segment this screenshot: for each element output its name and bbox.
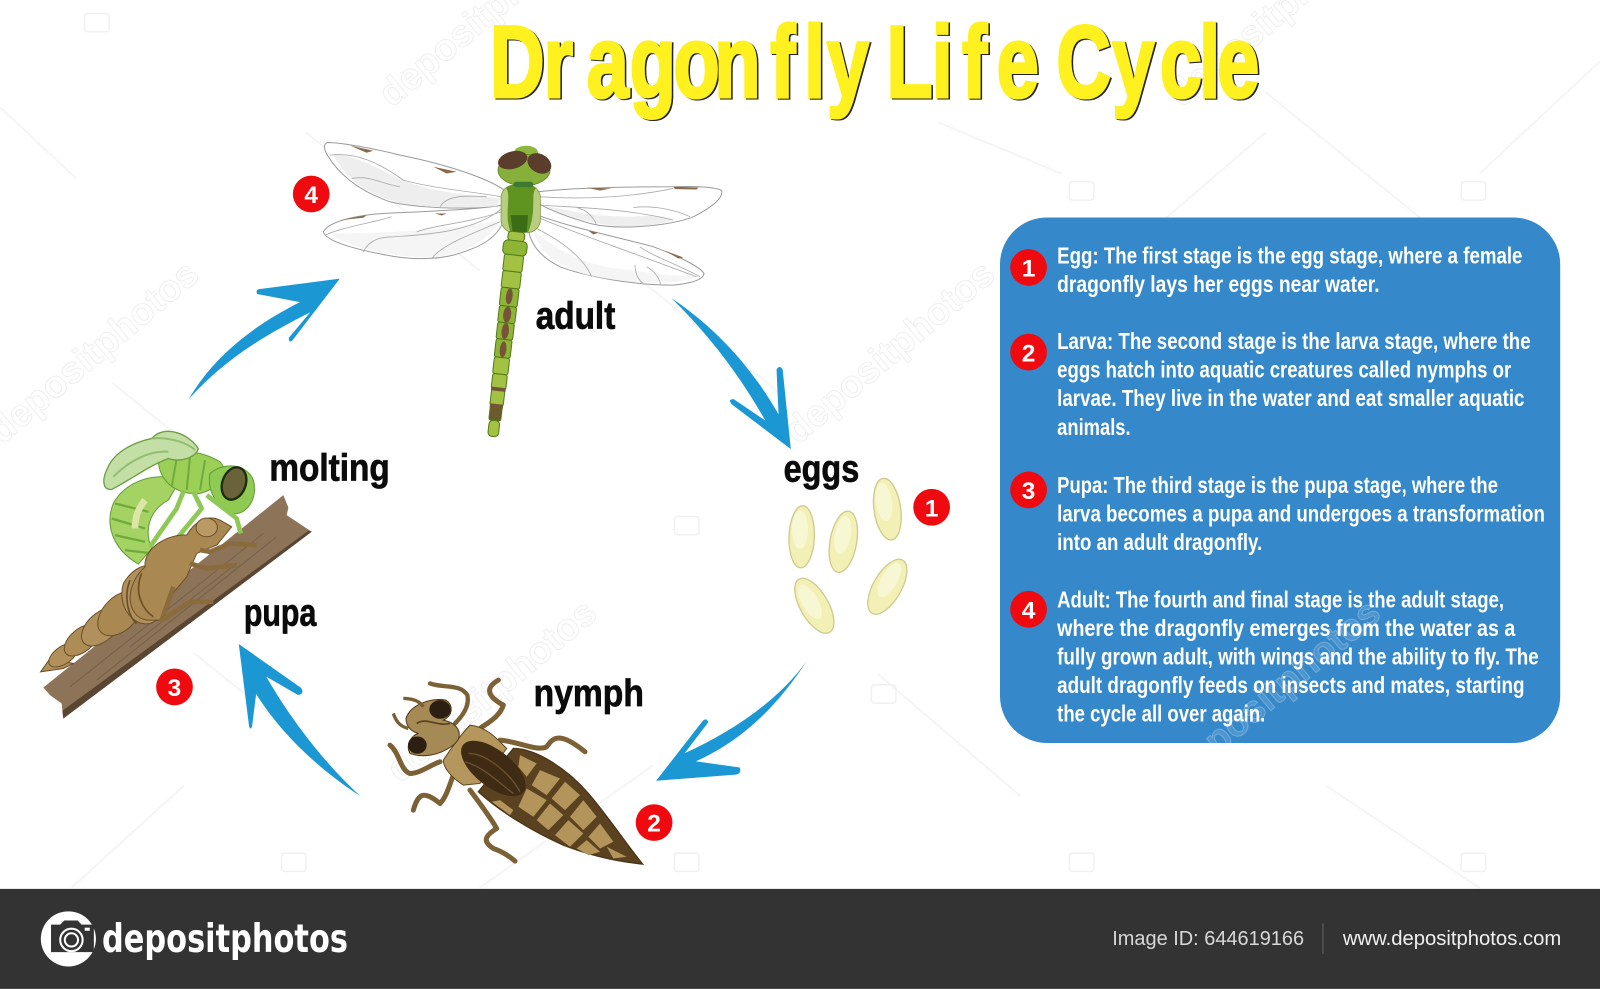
icon: adult dragonfly [323, 142, 722, 438]
panel: stage descriptions: depositphotos [1162, 591, 1388, 790]
brown exuvia [41, 518, 257, 672]
label: nymph: nymph [534, 672, 644, 714]
stage 3 pupa: 3 [1022, 478, 1035, 505]
nymph abdomen [478, 748, 643, 864]
stage 4 adult: the cycle all over again. [1057, 701, 1265, 727]
label: eggs: eggs [784, 448, 859, 490]
icon: nymph [390, 680, 643, 864]
stage 1 egg: dragonfly lays her eggs near water. [1057, 271, 1380, 297]
nymph head [393, 698, 459, 756]
arrow: nymph to pupa [239, 644, 360, 796]
badge: 4 on diagram [293, 176, 330, 212]
head [496, 146, 555, 187]
badge: 1 on diagram: 1 [925, 495, 938, 522]
website: www.depositphotos.com [1342, 928, 1561, 950]
badge: 4 on diagram: 4 [304, 182, 318, 209]
image id: Image ID: 644619166 [1112, 928, 1304, 950]
stage 4 adult: where the dragonfly emerges from the water as a [1056, 615, 1516, 641]
infographic canvas: depositphotos [776, 252, 1002, 451]
stage 4 adult: 4 [1022, 597, 1036, 624]
panel: stage descriptions [1000, 217, 1560, 790]
green adult emerging [104, 431, 255, 564]
nymph thorax and wings [443, 725, 535, 807]
badge: 2 on diagram [636, 804, 672, 841]
icon: eggs [787, 477, 915, 639]
stage 4 adult [1010, 586, 1539, 727]
badge: 1 on diagram [913, 489, 950, 526]
title: Dragonfly Life Cycle [490, 6, 1259, 120]
badge: 3 on diagram [156, 668, 193, 705]
stage 2 larva: 2 [1022, 340, 1035, 367]
abdomen [481, 230, 529, 438]
stage 1 egg [1010, 242, 1522, 297]
stage 2 larva: animals. [1057, 414, 1131, 440]
logo icon [41, 911, 96, 966]
arrow: pupa to adult [189, 279, 340, 399]
label: adult: adult [536, 295, 616, 337]
icon: molting dragonfly on branch [41, 431, 312, 718]
arrow: adult to eggs [671, 298, 791, 449]
arrow: eggs to nymph [656, 660, 807, 781]
logo wordmark: depositphotos [102, 917, 348, 962]
stage 2 larva [1010, 328, 1531, 440]
infographic canvas: depositphotos [378, 591, 604, 790]
label: pupa: pupa [244, 592, 317, 634]
badge: 3 on diagram: 3 [168, 675, 181, 702]
nymph legs and antennae [390, 680, 585, 861]
label: molting: molting [269, 447, 390, 489]
branch [43, 495, 312, 718]
badge: 2 on diagram: 2 [647, 811, 661, 838]
stage 3 pupa: into an adult dragonfly. [1057, 529, 1262, 555]
thorax [501, 185, 540, 232]
stage 1 egg: 1 [1022, 256, 1035, 283]
footer bar [0, 889, 1600, 989]
stage 3 pupa [1010, 472, 1545, 555]
